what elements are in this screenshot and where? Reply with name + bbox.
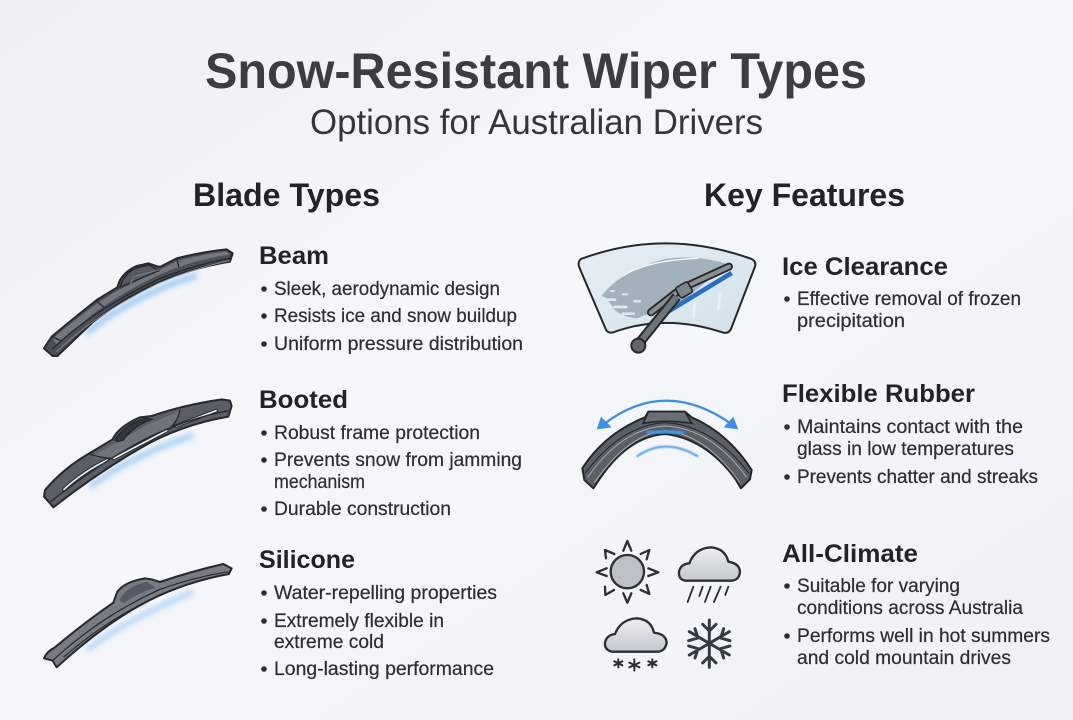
panel: blade types [44,177,523,680]
text block: ice clearance: Effective removal of frozen [797,289,1021,310]
panel: key features [579,177,1050,671]
text block: booted: Prevents snow from jamming [274,450,522,471]
text block: beam: Sleek, aerodynamic design [274,279,500,300]
text block: booted: Durable construction [274,499,451,520]
icon: flexible rubber blade [582,401,752,488]
text block: all-climate: Suitable for varying [797,576,960,597]
heading: key features: Key Features [704,177,905,213]
icon: beam wiper [44,249,233,356]
text block: booted: mechanism [274,472,365,493]
text block: flexible rubber: glass in low temperatures [797,439,1014,460]
icon: windshield ice clearance [579,243,755,353]
text block: all-climate: Performs well in hot summers [797,626,1050,647]
text block: all-climate: and cold mountain drives [797,648,1011,669]
text block: beam [259,242,523,355]
icon: weather symbols [597,541,740,671]
text block: booted: Robust frame protection [274,423,480,444]
text block: ice clearance: Ice Clearance [782,253,948,281]
icon: silicone wiper [44,564,232,667]
text block: flexible rubber: Prevents chatter and streaks [797,467,1038,488]
text block: all-climate: All-Climate [782,540,918,568]
title: Snow-Resistant Wiper Types [205,43,867,99]
icon: sun [597,541,658,603]
text block: flexible rubber [782,380,1038,488]
text block: silicone [259,546,497,680]
subtitle: Options for Australian Drivers [310,103,763,142]
icon: snowflake [689,620,730,667]
icon: snow cloud [605,618,667,671]
text block: silicone: extreme cold [274,632,384,653]
heading: blade types: Blade Types [193,177,380,213]
text block: silicone: Silicone [259,546,355,574]
text block: beam: Uniform pressure distribution [274,334,523,355]
text block: booted: Booted [259,386,348,414]
icon: booted wiper [44,399,232,507]
text block: beam: Beam [259,242,329,270]
icon: rain cloud [679,547,740,602]
text block: ice clearance [782,253,1021,332]
text block: all-climate [782,540,1050,669]
text block: silicone: Extremely flexible in [274,611,444,632]
text block: flexible rubber: Flexible Rubber [782,380,975,408]
text block: silicone: Long-lasting performance [274,659,494,680]
text block: all-climate: conditions across Australia [797,598,1023,619]
text block: flexible rubber: Maintains contact with the [797,417,1023,438]
text block: booted [259,386,522,520]
text block: ice clearance: precipitation [797,311,905,332]
text block: beam: Resists ice and snow buildup [274,306,517,327]
text block: silicone: Water-repelling properties [274,583,497,604]
